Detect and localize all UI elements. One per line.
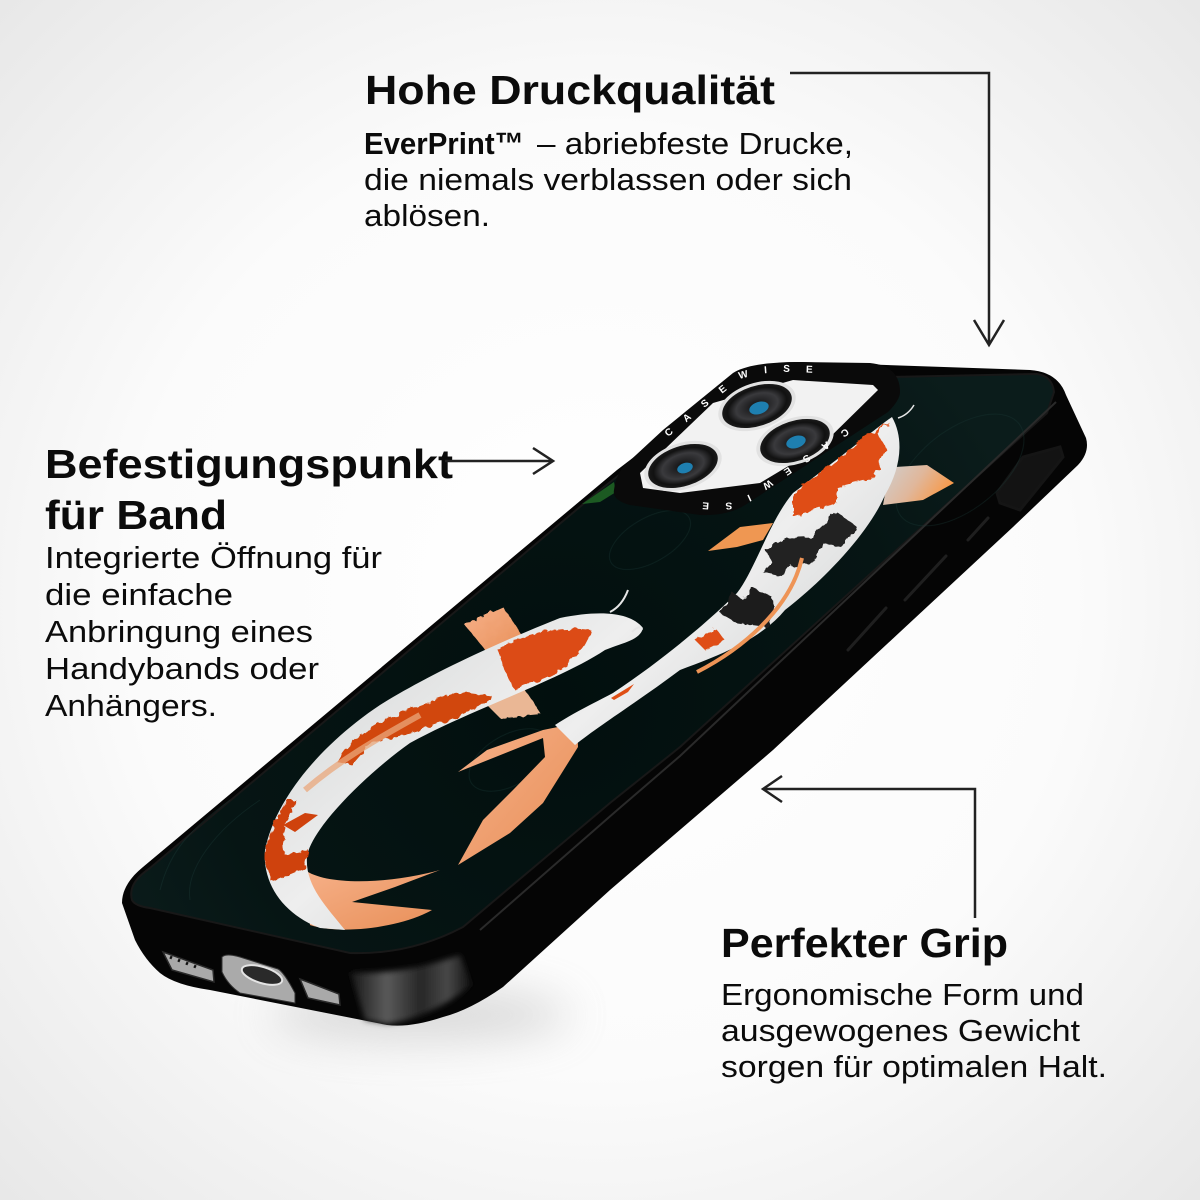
body (265, 613, 643, 930)
body text: ablösen. (364, 198, 490, 233)
dorsal fin (465, 607, 525, 656)
case body (122, 362, 1087, 1026)
ring lettering bottom: CASEWISE (702, 429, 848, 510)
side buttons (848, 447, 1063, 650)
charging port (222, 955, 295, 1003)
back patch (337, 692, 492, 765)
drop shadow (270, 989, 570, 1041)
arrow (790, 73, 1004, 345)
side stripe (264, 800, 309, 882)
rim highlight (480, 402, 1056, 930)
tail (458, 723, 578, 865)
green leaf (582, 482, 616, 504)
callout: strap attachment (45, 441, 553, 723)
fin stripe (305, 715, 420, 790)
barbels (610, 590, 642, 632)
heading (45, 441, 453, 538)
body text: Anbringung eines (45, 614, 313, 649)
heading: Befestigungspunkt (45, 441, 453, 487)
heading: Hohe Druckqualität (365, 67, 775, 113)
lens top (712, 372, 802, 440)
koi fish right (458, 405, 954, 865)
body text: Ergonomische Form und (721, 977, 1084, 1012)
lens right (750, 407, 840, 475)
orange spot (695, 628, 725, 650)
body text: die einfache (45, 577, 233, 612)
right fin (883, 465, 954, 505)
ring lettering top: CASEWISE (665, 364, 812, 436)
arrow (445, 448, 553, 474)
body text: – abriebfeste Drucke, (537, 126, 853, 161)
orange stripe (697, 558, 802, 672)
callout: grip (721, 776, 1107, 1084)
body text: die niemals verblassen oder sich (364, 162, 852, 197)
body text: ausgewogenes Gewicht (721, 1013, 1080, 1048)
water swirls (160, 392, 1044, 900)
phone case (122, 362, 1087, 1056)
left fin (708, 523, 773, 551)
black patch upper (763, 512, 857, 577)
left speaker (163, 952, 214, 982)
body text (364, 126, 853, 233)
callout: print quality (364, 67, 1004, 345)
body text: Integrierte Öffnung für (45, 540, 382, 575)
speaker holes (170, 957, 328, 991)
ports (163, 952, 340, 1005)
tail spot (611, 684, 634, 700)
body text (721, 977, 1107, 1084)
heading: Perfekter Grip (721, 920, 1008, 966)
lens left (638, 432, 728, 500)
back face (131, 374, 1054, 953)
corner gloss (350, 955, 472, 1024)
black patch lower (720, 588, 773, 627)
camera ring (614, 362, 900, 515)
camera module (614, 362, 900, 515)
tail (305, 870, 440, 930)
small patch (283, 813, 318, 832)
body text (45, 540, 382, 723)
heading: für Band (45, 492, 227, 538)
head patch (498, 629, 591, 690)
camera plate (640, 380, 878, 493)
orange head patch (793, 422, 890, 517)
side fin (480, 682, 541, 718)
body text: Anhängers. (45, 688, 217, 723)
body text: sorgen für optimalen Halt. (721, 1049, 1107, 1084)
right speaker (300, 979, 340, 1005)
arrow (763, 776, 975, 918)
barbel (898, 405, 914, 418)
body (555, 417, 899, 745)
body text: EverPrint™ (364, 126, 524, 161)
body text: Handybands oder (45, 651, 319, 686)
koi fish left (264, 590, 643, 930)
port opening (240, 961, 284, 989)
